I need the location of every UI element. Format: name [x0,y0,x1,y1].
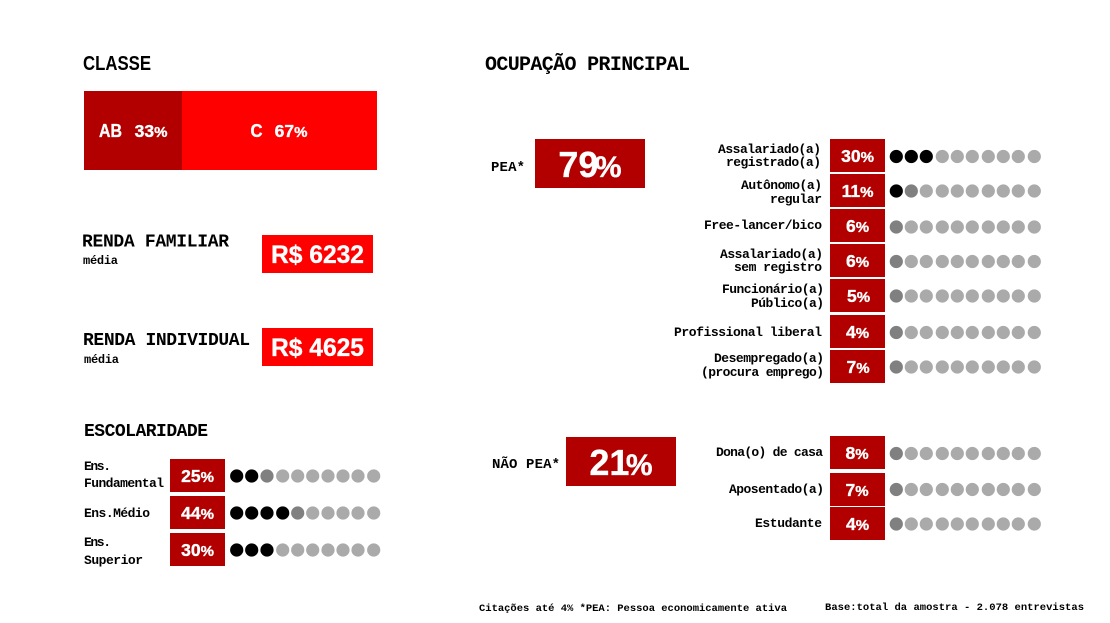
row: ens. superior: Ens. [84,535,111,550]
stacked bar: classe: C [250,121,262,141]
row: free-lancer [704,209,1041,242]
row: estudante: 4% [846,514,869,534]
panel: ocupacao nao pea [716,436,1041,540]
row: profissional liberal: 4% [846,322,869,342]
renda familiar: R$ 6232 [271,241,364,269]
row: autonomo regular [741,174,1041,207]
row: dona de casa [716,436,1041,469]
heading: ocupacao principal: OCUPAÇÃO PRINCIPAL [485,52,690,77]
row: autonomo regular: 11% [842,181,873,201]
row: desempregado: (procura emprego) [701,365,824,380]
row: ens. superior [84,533,380,568]
row: dona de casa: Dona(o) de casa [716,445,823,460]
row: desempregado: Desempregado(a) [714,351,824,366]
footnote: citacoes: Citações até 4% *PEA: Pessoa economicamente ativa [479,603,788,615]
row: funcionario publico [722,279,1041,312]
row: assalariado registrado: 30% [841,146,874,166]
renda familiar [82,232,373,273]
row: ens. fundamental: Fundamental [84,476,164,491]
row: ens. medio [84,496,380,529]
row: assalariado sem registro [720,244,1041,277]
row: estudante [755,507,1041,540]
renda familiar: média [83,254,118,268]
row: ens. medio: 44% [181,503,214,523]
panel: ocupacao pea [674,139,1041,383]
row: ens. superior: Superior [84,553,143,568]
callout: nao pea: 21% [589,442,653,483]
row: assalariado sem registro: Assalariado(a) [720,247,823,262]
row: ens. superior: 30% [181,540,214,560]
row: funcionario publico: 5% [847,286,870,306]
row: funcionario publico: Público(a) [751,296,824,311]
row: funcionario publico: Funcionário(a) [722,282,824,297]
row: profissional liberal: Profissional liberal [674,325,822,340]
row: ens. medio: Ens.Médio [84,506,150,521]
row: aposentado: 7% [845,480,869,500]
row: assalariado sem registro: 6% [846,251,869,271]
heading: classe: CLASSE [83,53,151,75]
row: autonomo regular: Autônomo(a) [741,178,822,193]
callout: pea [491,139,645,188]
row: desempregado: 7% [846,357,870,377]
row: dona de casa: 8% [845,443,869,463]
stacked bar: classe: 67% [275,121,307,141]
row: free-lancer: Free-lancer/bico [704,218,822,233]
stacked bar: classe: AB [99,121,122,141]
callout: pea: PEA* [491,160,525,176]
row: assalariado registrado: registrado(a) [726,155,821,170]
renda individual: RENDA INDIVIDUAL [83,331,250,351]
row: ens. fundamental [84,459,380,492]
row: desempregado [701,350,1041,383]
renda individual: média [84,353,119,367]
renda individual [83,328,373,367]
callout: nao pea [492,437,676,486]
row: ens. fundamental: 25% [181,466,214,486]
row: free-lancer: 6% [846,216,869,236]
row: ens. fundamental: Ens. [84,459,111,474]
callout: pea: 79% [558,144,622,185]
panel: escolaridade [84,459,380,568]
row: assalariado registrado: Assalariado(a) [718,142,821,157]
row: aposentado [729,473,1041,506]
row: autonomo regular: regular [770,192,822,207]
footnote: base: Base:total da amostra - 2.078 entrevistas [825,602,1084,614]
row: assalariado registrado [718,139,1041,172]
stacked bar: classe: 33% [135,121,167,141]
row: profissional liberal [674,315,1041,348]
row: assalariado sem registro: sem registro [734,260,822,275]
heading: escolaridade: ESCOLARIDADE [84,422,208,442]
row: aposentado: Aposentado(a) [729,482,824,497]
stacked bar: classe [84,91,377,170]
callout: nao pea: NÃO PEA* [492,455,560,473]
renda familiar: RENDA FAMILIAR [82,232,229,252]
row: estudante: Estudante [755,516,822,531]
renda individual: R$ 4625 [271,334,364,362]
